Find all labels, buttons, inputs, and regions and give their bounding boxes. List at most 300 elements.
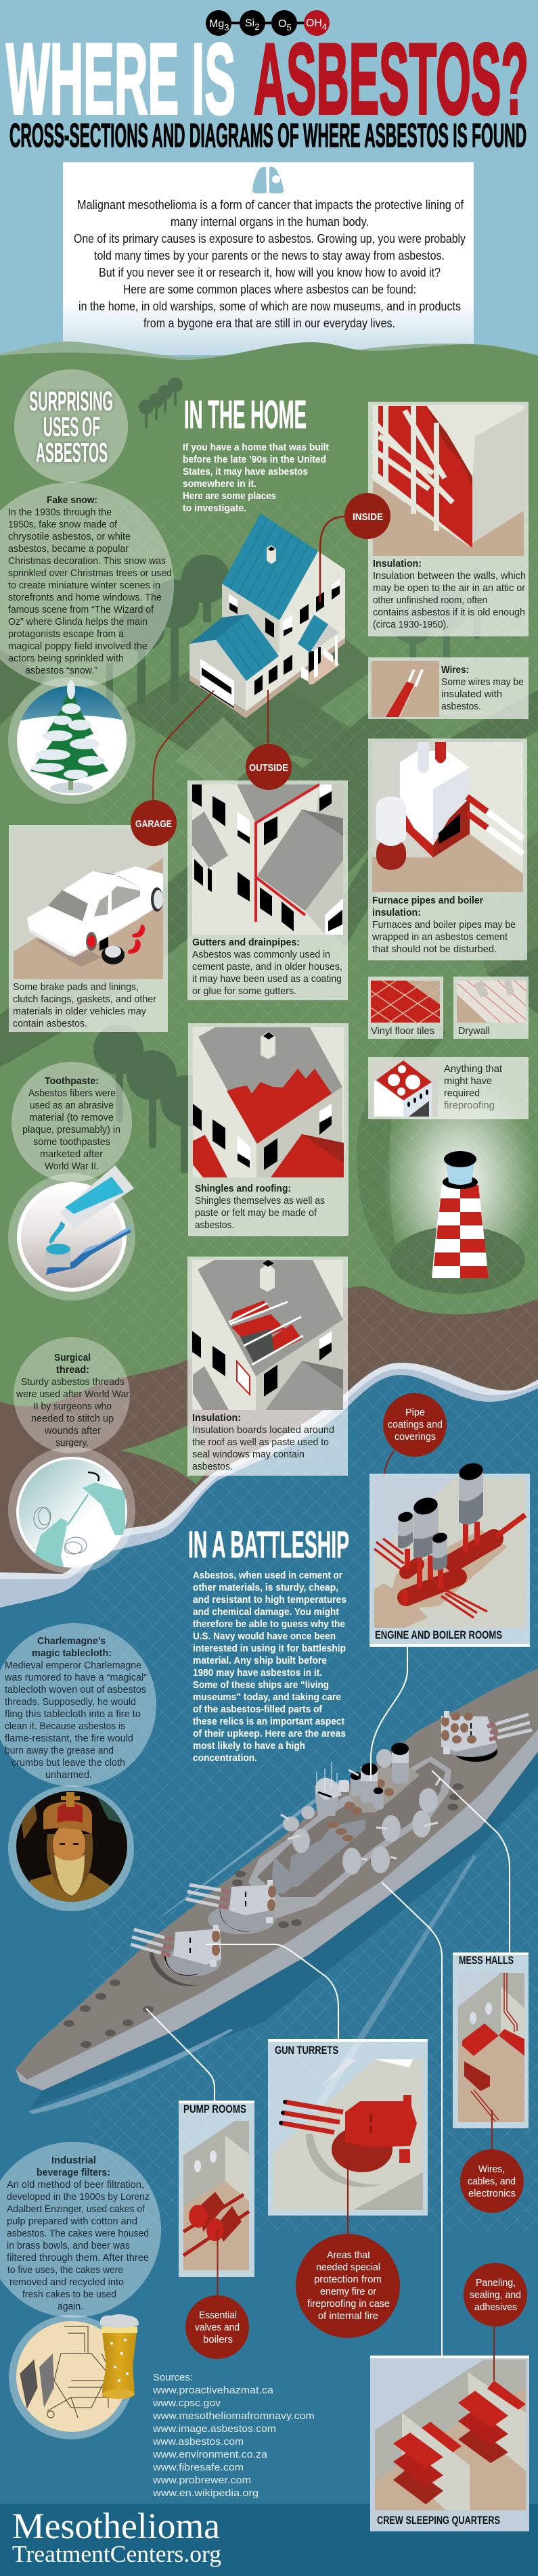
background trees right bbox=[391, 568, 480, 676]
label: outside: OUTSIDE bbox=[249, 762, 288, 774]
illustration: pump bbox=[183, 2121, 249, 2270]
furnace text: insulation: bbox=[372, 907, 421, 918]
illustration: car bbox=[14, 830, 163, 979]
charlemagne heading bbox=[32, 1635, 112, 1659]
intro text: from a bygone era that are still in our everyday lives. bbox=[143, 317, 395, 330]
intro text: One of its primary causes is exposure to asbestos. Growing up, you were probably bbox=[74, 232, 466, 245]
label: paneling sealing adhesives bbox=[464, 2263, 527, 2326]
toothpaste text: used as an abrasive bbox=[30, 1100, 114, 1111]
illustration: drywall bbox=[457, 981, 526, 1023]
battleship intro text: Asbestos, when used in cement or bbox=[193, 1570, 342, 1581]
label: valves and boilers: Essential bbox=[199, 2310, 237, 2321]
diagonal ground bands bbox=[0, 649, 538, 1067]
label: special protection: fireproofing in case bbox=[307, 2298, 390, 2310]
sources: Sources: bbox=[153, 2372, 193, 2383]
footer band bbox=[0, 2504, 538, 2576]
toothpaste text bbox=[22, 1087, 120, 1172]
toothpaste text: marketed after bbox=[40, 1148, 103, 1160]
fake snow text: magical poppy field involved the bbox=[8, 640, 148, 652]
label: outside bbox=[246, 744, 292, 790]
battleship intro text: museums” today, and taking care bbox=[193, 1691, 341, 1703]
surgical text: were used after World War bbox=[16, 1388, 129, 1400]
callout: crew quarters bbox=[382, 1882, 442, 2356]
sources: www.cpsc.gov bbox=[152, 2397, 221, 2409]
illustration: stove bbox=[372, 1060, 438, 1117]
lighthouse glow bbox=[382, 1075, 538, 1285]
label: pipe coatings: Pipe bbox=[405, 1407, 425, 1418]
panel: drywall bbox=[453, 977, 529, 1039]
panel: pump rooms bbox=[179, 2101, 254, 2277]
filters heading: beverage filters: bbox=[37, 2167, 110, 2178]
logo: Mesothelioma bbox=[12, 2506, 220, 2546]
callout: pump rooms bbox=[146, 2009, 215, 2101]
fake snow text bbox=[8, 507, 172, 676]
surgical text: surgery. bbox=[55, 1437, 89, 1449]
gutters text: cement paste, and in older houses, bbox=[192, 961, 342, 973]
battleship intro text: most likely to have a high bbox=[193, 1740, 305, 1752]
heading circle: surprising uses: SURPRISING bbox=[29, 385, 113, 417]
mid block bbox=[288, 1819, 365, 1887]
battleship intro text: and chemical damage. You might bbox=[193, 1606, 339, 1618]
illustration: snowy christmas tree bbox=[8, 677, 135, 804]
shingles text: asbestos. bbox=[195, 1219, 234, 1231]
sources: www.probrewer.com bbox=[152, 2475, 251, 2486]
label: wires cables electronics: electronics bbox=[468, 2188, 516, 2199]
filters text: to five uses, the cakes were bbox=[7, 2264, 123, 2276]
insulation text: Insulation between the walls, which bbox=[373, 570, 526, 582]
filters text: removed and recycled into bbox=[9, 2276, 124, 2288]
brown land bbox=[0, 1286, 538, 1623]
fake snow text: 1950s, fake snow made of bbox=[8, 519, 118, 530]
illustration: toothbrush and toothpaste bbox=[8, 1165, 135, 1301]
fake snow text: Oz” where Glinda helps the main bbox=[8, 616, 148, 628]
illustration: mess hall bbox=[458, 1973, 524, 2122]
garage text bbox=[13, 981, 156, 1029]
toothpaste text: material (to remove bbox=[29, 1112, 114, 1123]
fake snow text: asbestos, became a popular bbox=[8, 543, 129, 555]
ground strip near house bbox=[460, 832, 538, 974]
circle: industrial beverage filters bbox=[0, 2142, 161, 2318]
surgical heading bbox=[54, 1352, 91, 1376]
gun turrets caption: GUN TURRETS bbox=[275, 2044, 338, 2057]
callout: mess halls bbox=[432, 1771, 510, 1952]
bridge tower bbox=[315, 1762, 349, 1816]
garage text: Some brake pads and linings, bbox=[13, 981, 139, 993]
battleship intro text: U.S. Navy would have once been bbox=[193, 1631, 336, 1642]
charlemagne text: fling this tablecloth into a fire to bbox=[5, 1708, 141, 1720]
wires text: insulated with bbox=[441, 688, 502, 700]
wires text: Some wires may be bbox=[441, 676, 524, 688]
panel: mess halls bbox=[453, 1952, 529, 2128]
fireproofing text bbox=[444, 1063, 503, 1111]
panel: furnace bbox=[368, 739, 527, 960]
lighthouse base shadow bbox=[390, 1226, 525, 1294]
battleship intro text: these relics is an important aspect bbox=[193, 1716, 344, 1727]
molecule formula chain: 5 bbox=[286, 22, 292, 32]
sources: www.mesotheliomafromnavy.com bbox=[152, 2410, 315, 2422]
insulation outside text bbox=[192, 1412, 334, 1472]
callout: engine to ship bbox=[371, 1647, 407, 1781]
distant hills bbox=[0, 342, 538, 406]
insulation outside text: Insulation boards located around bbox=[192, 1424, 334, 1436]
deck bbox=[16, 1668, 538, 2080]
label: special protection bbox=[296, 2234, 400, 2338]
surgical text: wounds after bbox=[44, 1425, 101, 1436]
label: pipe coatings: coatings and bbox=[388, 1419, 443, 1430]
gutters text: or glue for some gutters. bbox=[192, 985, 296, 997]
charlemagne text: threads. Supposedly, he would bbox=[5, 1696, 136, 1708]
battleship intro text: interested in using it for battleship bbox=[193, 1643, 346, 1654]
charlemagne text: was rumored to have a “magical” bbox=[4, 1672, 147, 1683]
lighter ground diamond bbox=[176, 717, 264, 791]
label: special protection: Areas that bbox=[327, 2249, 371, 2261]
panel: garage bbox=[9, 825, 168, 1032]
charlemagne heading: Charlemagne’s bbox=[37, 1635, 106, 1647]
connector: inside bbox=[320, 517, 344, 602]
label: garage bbox=[131, 800, 177, 846]
upper block bbox=[349, 1765, 420, 1812]
logo: TreatmentCenters.org bbox=[12, 2541, 221, 2567]
wires text bbox=[441, 664, 524, 712]
heading: in a battleship: IN A BATTLESHIP bbox=[188, 1523, 349, 1566]
illustration: furnace bbox=[372, 742, 523, 892]
intro text: Here are some common places where asbestos can be found: bbox=[123, 283, 416, 296]
toothpaste heading: Toothpaste: bbox=[45, 1075, 99, 1087]
label: paneling sealing adhesives: adhesives bbox=[474, 2301, 517, 2313]
tiles caption: Vinyl floor tiles bbox=[371, 1025, 434, 1037]
label: wires cables electronics: Wires, bbox=[478, 2163, 505, 2175]
surgical text: needed to stitch up bbox=[31, 1413, 114, 1424]
molecule formula chain bbox=[206, 10, 330, 36]
gutters text: Gutters and drainpipes: bbox=[192, 937, 300, 948]
panel: insulation outside bbox=[187, 1257, 348, 1476]
home intro text: to investigate. bbox=[183, 502, 246, 514]
fake snow heading: Fake snow: bbox=[47, 494, 97, 506]
charlemagne text bbox=[4, 1660, 147, 1781]
garage text: contain asbestos. bbox=[13, 1018, 87, 1029]
wires text: asbestos. bbox=[441, 701, 481, 712]
engine caption: ENGINE AND BOILER ROOMS bbox=[375, 1629, 502, 1641]
shingles text: paste or felt may be made of bbox=[195, 1207, 317, 1219]
label: special protection: enemy fire or bbox=[320, 2286, 376, 2297]
deck vents bbox=[328, 1779, 394, 1842]
connector: paneling bbox=[493, 2326, 495, 2381]
battleship bbox=[16, 1668, 538, 2090]
molecule formula chain: OH bbox=[306, 18, 322, 29]
water bbox=[0, 1375, 538, 2576]
superstructure bbox=[248, 1756, 451, 1919]
filters text: asbestos. The cakes were housed bbox=[7, 2228, 149, 2239]
fake snow text: actors being sprinkled with bbox=[8, 653, 124, 664]
superstructure inner bbox=[257, 1762, 445, 1897]
garage text: materials in older vehicles may bbox=[13, 1006, 146, 1017]
fake snow text: In the 1930s through the bbox=[8, 507, 112, 518]
molecule formula chain: 3 bbox=[224, 22, 229, 32]
background trees top bbox=[139, 377, 183, 428]
battleship intro text: therefore be able to guess why the bbox=[193, 1618, 345, 1630]
fake snow text: to create miniature winter scenes in bbox=[8, 580, 160, 591]
deck portholes bbox=[64, 1783, 464, 2048]
filters text: An old method of beer filtration, bbox=[7, 2179, 144, 2191]
fake snow text: protagonists escape from a bbox=[8, 628, 125, 640]
drywall caption: Drywall bbox=[458, 1025, 490, 1037]
molecule formula chain: O bbox=[278, 18, 286, 30]
label: valves and boilers: valves and bbox=[195, 2322, 240, 2333]
shingles text bbox=[195, 1183, 325, 1231]
battleship intro text: of the asbestos-filled parts of bbox=[193, 1704, 323, 1715]
label: wires cables electronics: cables, and bbox=[468, 2176, 516, 2187]
heading text: USES OF bbox=[43, 411, 100, 442]
fireproofing text: fireproofing bbox=[444, 1100, 495, 1111]
home intro text bbox=[183, 442, 329, 514]
illustration: shingles bbox=[193, 1027, 344, 1177]
connector: wires bbox=[491, 2110, 493, 2149]
panel: crew sleeping quarters bbox=[370, 2356, 529, 2531]
illustration: beer filter diagram bbox=[9, 2314, 139, 2439]
insulation outside text: Insulation: bbox=[192, 1412, 241, 1424]
molecule formula chain: 2 bbox=[254, 22, 259, 32]
battleship intro text: Some of these ships are “living bbox=[193, 1679, 329, 1691]
connector: pipe coatings bbox=[383, 1451, 395, 1533]
heading circle: surprising uses bbox=[14, 369, 128, 483]
garage text: clutch facings, gaskets, and other bbox=[13, 993, 156, 1005]
surgical text bbox=[16, 1376, 129, 1449]
gutters text: Asbestos was commonly used in bbox=[192, 949, 330, 960]
battleship intro text: concentration. bbox=[193, 1752, 257, 1764]
label: valves and boilers: boilers bbox=[203, 2334, 233, 2345]
filters text: again. bbox=[58, 2301, 83, 2312]
sources: www.image.asbestos.com bbox=[152, 2423, 276, 2435]
heading text bbox=[29, 385, 113, 468]
connector: outside bbox=[267, 690, 269, 745]
fireproofing text: might have bbox=[444, 1075, 492, 1087]
battleship intro text: of their upkeep. Here are the areas bbox=[193, 1728, 346, 1739]
sources: www.proactivehazmat.ca bbox=[152, 2385, 274, 2396]
intro panel bbox=[63, 162, 474, 355]
charlemagne text: tablecloth woven out of asbestos bbox=[5, 1684, 146, 1695]
fake snow text: sprinkled over Christmas trees or used bbox=[8, 567, 172, 579]
fireproofing text: Anything that bbox=[444, 1063, 503, 1075]
intro text bbox=[74, 198, 466, 330]
filters text: developed in the 1900s by Lorenz bbox=[7, 2191, 150, 2203]
panel: gutters bbox=[187, 780, 348, 1000]
panel: engine and boiler rooms bbox=[369, 1461, 530, 1647]
home intro text: If you have a home that was built bbox=[183, 442, 329, 453]
filters heading: Industrial bbox=[51, 2155, 96, 2166]
intro text: many internal organs in the human body. bbox=[171, 215, 369, 229]
panel: wires bbox=[368, 657, 529, 719]
filters text: filtered through them. After three bbox=[7, 2252, 149, 2264]
foam band mid bbox=[0, 1369, 538, 1826]
insulation text: Insulation: bbox=[373, 558, 422, 569]
charlemagne text: unharmed. bbox=[45, 1769, 92, 1781]
small gun barrels bbox=[281, 1770, 440, 1860]
insulation text bbox=[373, 558, 526, 630]
furnace text: that should not be disturbed. bbox=[372, 943, 497, 955]
filters text: pulp prepared with cotton and bbox=[7, 2216, 137, 2227]
sources bbox=[152, 2372, 315, 2499]
circle: fake snow bbox=[0, 482, 174, 688]
label: inside bbox=[344, 493, 390, 539]
connector: pump bbox=[217, 2230, 218, 2295]
label: valves and boilers bbox=[185, 2295, 249, 2359]
label: special protection: of internal fire bbox=[318, 2310, 378, 2322]
turret: bow side top bbox=[441, 1711, 532, 1762]
icon: lungs bbox=[252, 167, 284, 193]
insulation outside text: asbestos. bbox=[192, 1461, 233, 1472]
illustration: boilers bbox=[374, 1461, 526, 1628]
circle: toothpaste bbox=[12, 1062, 132, 1182]
panel: fireproofing bbox=[368, 1057, 529, 1119]
home intro text: Here are some places bbox=[183, 490, 276, 502]
intro text: told many times by your parents or the news to stay away from asbestos. bbox=[94, 249, 445, 262]
circle: charlemagne bbox=[0, 1623, 156, 1787]
panel: shingles bbox=[188, 1023, 349, 1236]
insulation text: other unfinished room, often bbox=[373, 594, 487, 606]
insulation outside text: seal windows may contain bbox=[192, 1449, 305, 1460]
charlemagne text: crumbs but leave the cloth bbox=[12, 1757, 125, 1769]
panel: insulation bbox=[368, 402, 529, 636]
dark crescent band around lighthouse bbox=[357, 1014, 447, 1278]
illustration: gun turret bbox=[273, 2059, 423, 2210]
connector: garage bbox=[153, 690, 214, 801]
insulation outside text: the roof as well as paste used to bbox=[192, 1436, 329, 1448]
connector: gun turret bbox=[347, 2163, 349, 2234]
illustration: charlemagne portrait bbox=[8, 1785, 134, 1911]
sources: www.asbestos.com bbox=[152, 2436, 244, 2448]
molecule formula chain: Si bbox=[245, 18, 254, 29]
hull water shadow bbox=[30, 1752, 538, 2109]
shingles text: Shingles themselves as well as bbox=[195, 1195, 325, 1207]
molecule formula chain: Mg bbox=[209, 18, 224, 30]
furnace text: Furnace pipes and boiler bbox=[372, 895, 483, 906]
battleship intro text: 1980 may have asbestos in it. bbox=[193, 1667, 322, 1679]
illustration: gutters bbox=[192, 784, 343, 935]
label: inside: INSIDE bbox=[353, 511, 383, 523]
filters text bbox=[7, 2179, 150, 2312]
toothpaste text: Asbestos fibers were bbox=[28, 1087, 116, 1099]
title: WHERE IS bbox=[6, 22, 236, 135]
label: pipe coatings bbox=[383, 1393, 447, 1457]
insulation text: (circa 1930-1950). bbox=[373, 619, 449, 630]
illustration: roof insulation bbox=[192, 1260, 343, 1410]
sources: www.fibresafe.com bbox=[152, 2462, 244, 2473]
illustration: tiles bbox=[371, 981, 440, 1023]
pump rooms caption: PUMP ROOMS bbox=[183, 2103, 246, 2115]
fake snow text: asbestos “snow.” bbox=[25, 665, 97, 676]
circle: surgical thread bbox=[14, 1337, 130, 1453]
surgical heading: Surgical bbox=[54, 1352, 91, 1363]
fake snow text: chrysotile asbestos, or white bbox=[8, 531, 131, 542]
sources: www.environment.co.za bbox=[152, 2449, 268, 2460]
filters heading bbox=[37, 2155, 110, 2178]
wires text: Wires: bbox=[441, 664, 469, 676]
small turrets bbox=[283, 1749, 438, 1875]
home intro text: States, it may have asbestos bbox=[183, 466, 308, 477]
fake snow text: famous scene from “The Wizard of bbox=[8, 604, 154, 615]
green ground bbox=[0, 342, 538, 1488]
illustration: lighthouse bbox=[432, 1151, 489, 1278]
insulation text: contains asbestos if it is old enough bbox=[373, 607, 525, 618]
panel: gun turrets bbox=[268, 2039, 428, 2216]
background trees by house bbox=[106, 555, 230, 705]
label: wires cables electronics bbox=[460, 2149, 524, 2213]
charlemagne text: burn away the grease and bbox=[5, 1745, 114, 1756]
illustration: wires bbox=[372, 661, 439, 717]
battleship intro text: other materials, is sturdy, cheap, bbox=[193, 1582, 338, 1593]
logo bbox=[12, 2506, 221, 2567]
label: paneling sealing adhesives: sealing, and bbox=[470, 2289, 521, 2301]
funnels bbox=[351, 1743, 409, 1810]
intro text: Malignant mesothelioma is a form of cancer that impacts the protective lining of bbox=[77, 198, 464, 212]
surgical text: Sturdy asbestos threads bbox=[21, 1376, 125, 1388]
furnace text bbox=[372, 895, 516, 955]
label: special protection: protection from bbox=[314, 2274, 382, 2285]
fake snow text: Christmas decoration. This snow was bbox=[8, 555, 166, 567]
foam band light bbox=[0, 1363, 538, 1826]
furnace text: wrapped in an asbestos cement bbox=[372, 931, 508, 943]
filters text: fresh cakes to be used bbox=[22, 2289, 116, 2300]
label: paneling sealing adhesives: Paneling, bbox=[476, 2277, 516, 2289]
battleship intro text: material. Any ship built before bbox=[193, 1655, 327, 1666]
charlemagne text: clean it. Because asbestos is bbox=[5, 1720, 125, 1732]
home intro text: somewhere in it. bbox=[183, 478, 256, 490]
filters text: Adalbert Enzinger, used cakes of bbox=[7, 2203, 145, 2215]
toothpaste text: plaque, presumably) in bbox=[22, 1124, 120, 1135]
mess halls caption: MESS HALLS bbox=[459, 1954, 514, 1967]
background trees middle bbox=[93, 1025, 212, 1173]
home intro text: before the late ’90s in the United bbox=[183, 454, 326, 465]
intro text: in the home, in old warships, some of which are now museums, and in products bbox=[79, 300, 461, 313]
illustration: crew quarters bbox=[375, 2360, 526, 2510]
charlemagne text: Medieval emperor Charlemagne bbox=[5, 1660, 141, 1671]
fireproofing text: required bbox=[444, 1087, 480, 1099]
illustration: insulation wall bbox=[373, 405, 529, 556]
intro text: But if you never see it or research it, how will you know how to avoid it? bbox=[99, 266, 441, 279]
battleship intro text: and resistant to high temperatures bbox=[193, 1594, 346, 1606]
sky background bbox=[0, 0, 538, 379]
crosshatch lattice bbox=[88, 500, 538, 2232]
callout: gun turrets bbox=[206, 1944, 338, 2039]
label: pipe coatings: coverings bbox=[395, 1431, 436, 1443]
furnace text: Furnaces and boiler pipes may be bbox=[372, 919, 516, 931]
charlemagne heading: magic tablecloth: bbox=[32, 1647, 112, 1659]
wake streaks bbox=[28, 1799, 476, 2114]
gutters text bbox=[192, 937, 342, 997]
green wedge bbox=[120, 1424, 210, 1484]
toothpaste text: some toothpastes bbox=[33, 1136, 110, 1148]
text: IN THE HOME bbox=[184, 393, 307, 437]
illustration: house bbox=[189, 513, 379, 734]
hull side bbox=[16, 1668, 538, 2090]
molecule formula chain: 4 bbox=[322, 22, 327, 32]
fake snow text: storefronts and home windows. The bbox=[8, 592, 162, 603]
toothpaste text: World War II. bbox=[45, 1161, 99, 1172]
insulation text: may be open to the air in an attic or bbox=[373, 582, 525, 594]
surgical text: II by surgeons who bbox=[33, 1401, 112, 1412]
label: garage: GARAGE bbox=[135, 818, 172, 830]
turret: front bbox=[131, 1925, 221, 1986]
illustration: surgical thread bbox=[8, 1447, 135, 1574]
filters text: in brass bowls, and beer was bbox=[7, 2240, 130, 2251]
panel: vinyl floor tiles bbox=[368, 977, 443, 1039]
label: special protection: needed special bbox=[316, 2262, 380, 2273]
heading text: ASBESTOS bbox=[36, 437, 108, 468]
shingles text: Shingles and roofing: bbox=[195, 1183, 291, 1194]
central gun block bbox=[271, 1856, 298, 1894]
sources: www.en.wikipedia.org bbox=[152, 2487, 259, 2499]
turret: rear bbox=[186, 1880, 276, 1934]
